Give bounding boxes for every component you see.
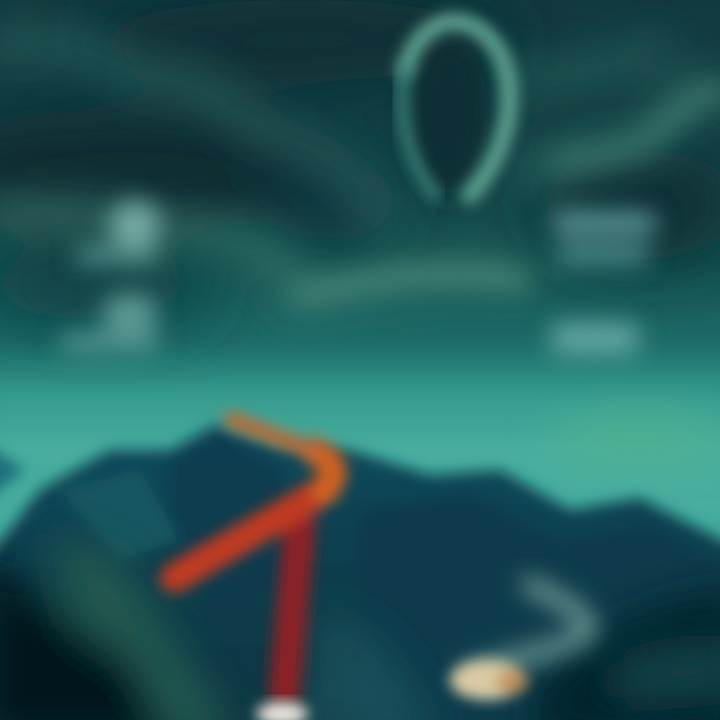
ring in the sky [403,22,509,195]
soft green cloud haze [0,42,720,295]
pale blurred cloud label blocks [60,201,657,356]
horizon glow [0,390,720,468]
dark cloud masses [0,0,720,320]
ring: faint left edge [403,70,435,195]
arrow base: white tip [256,702,308,720]
wispy cloud highlights [300,92,720,295]
glowing base near the river [450,660,528,700]
mountain range [0,425,720,720]
foreground hills [0,530,720,720]
stream of light in the valley [470,585,588,675]
arrow: red and orange bent arrow [175,420,333,690]
ring: glowing band [405,22,509,195]
ring: dark centre [408,35,488,195]
